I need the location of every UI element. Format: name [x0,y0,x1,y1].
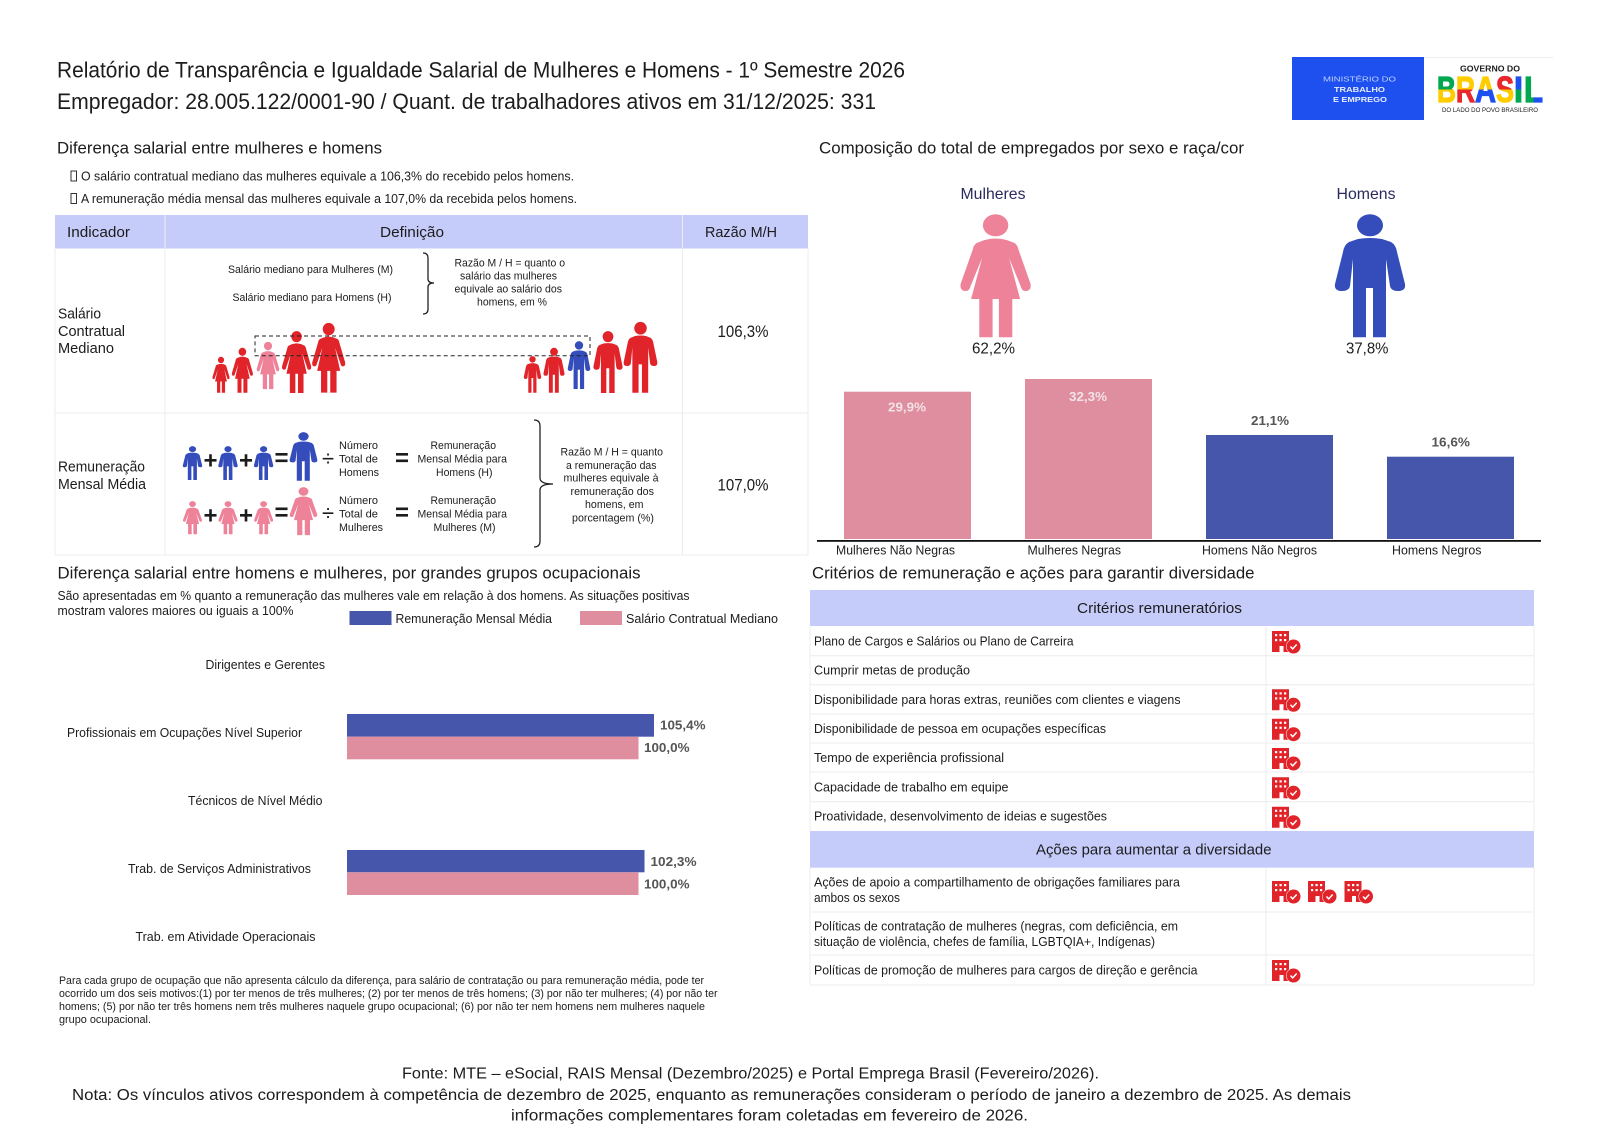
logos: MINISTÉRIO DO [1323,74,1396,84]
bar chart: grupos: 100,0% [644,876,690,892]
bar chart: grupos: Trab. em Atividade Operacionais [136,930,316,944]
bar chart: grupos: Profissionais em Ocupações Nível Superior [67,726,302,740]
bar chart: grupos: 105,4% [660,718,706,732]
logos: A [1475,69,1496,110]
bar chart: raça/cor: Homens Não Negros [1202,544,1317,558]
formula: women [183,487,508,535]
formula: men [183,432,508,481]
row label: remuneração mensal média: Remuneração [58,460,145,476]
action rows: Políticas de promoção de mulheres para cargos de direção e gerência [814,962,1198,978]
table: critérios [810,590,1534,985]
bar chart: raça/cor [817,379,1541,558]
formula: women: Mensal Média para [418,508,508,520]
formula: men: Homens (H) [436,467,492,479]
legend [350,611,778,626]
logos: L [1524,69,1543,110]
table header: Razão M/H [705,224,777,241]
icon: man [1335,214,1405,337]
table header: Indicador [67,224,130,241]
legend: Remuneração Mensal Média [396,611,553,626]
bar chart: grupos: Dirigentes e Gerentes [206,658,325,672]
table header [67,224,777,241]
formula: men: Mensal Média para [418,454,508,466]
definition text: salário mediano: Salário mediano para Mulheres (M) [228,264,393,276]
formula: men: Remuneração [430,440,496,452]
title [57,58,905,114]
formula: women: + [239,502,253,530]
brace [423,253,434,314]
bar chart: raça/cor: 32,3% [1069,389,1107,404]
footnote: motivos: homens; (5) por não ter três homens nem três mulheres naquele grupo ocupacional; (6) por não ter nem homens nem mulheres naquele [59,1001,705,1013]
formula: women: + [203,502,218,530]
icons: actions [1272,881,1374,983]
formula: women: Total de [339,508,378,520]
formula: men: Total de [339,454,378,466]
footnote: motivos [59,975,718,1026]
band: ações: Ações para aumentar a diversidade [1036,842,1272,858]
formula: men: Homens [339,467,379,479]
row label: salário contratual mediano: Mediano [58,341,114,357]
logos: S [1496,69,1514,110]
ratio explanation 1: Razão M / H = quanto o [454,258,565,270]
bar chart: raça/cor: Mulheres Não Negras [836,544,955,558]
row label: remuneração mensal média [58,460,147,493]
legend: Salário Contratual Mediano [626,611,778,626]
title: Relatório de Transparência e Igualdade Salarial de Mulheres e Homens - 1º Semestre 2026 [57,58,905,82]
footer: fonte e nota: informações complementares foram coletadas em fevereiro de 2026. [511,1108,1028,1124]
panel: diferença salarial [55,140,808,555]
bar chart: raça/cor: Mulheres Negras [1028,544,1121,558]
action rows [814,874,1198,978]
formula: women: Mulheres [339,522,383,534]
row label: remuneração mensal média: Mensal Média [58,477,147,493]
bullet 1: O salário contratual mediano das mulheres equivale a 106,3% do recebido pelos homens. [81,170,574,184]
criteria rows: Proatividade, desenvolvimento de ideias e sugestões [814,808,1107,824]
formula: men: + [239,448,253,474]
footer: fonte e nota [72,1066,1351,1124]
bar chart: grupos: Técnicos de Nível Médio [188,794,323,808]
logos [1292,57,1553,120]
logos: TRABALHO [1334,85,1385,94]
formula: men: Número [339,440,378,452]
ratio explanation 2 [560,446,663,524]
title: Empregador: 28.005.122/0001-90 / Quant. de trabalhadores ativos em 31/12/2025: 331 [57,89,876,114]
criteria rows: Plano de Cargos e Salários ou Plano de Carreira [814,634,1074,648]
definition text: salário mediano: Salário mediano para Homens (H) [232,292,392,304]
footnote: motivos: ocorrido um dos seis motivos:(1) por ter menos de três mulheres; (2) por ter menos de três homens; (3) por não ter mulheres; (4) por não ter [59,988,718,1000]
description [58,589,690,618]
footnote: motivos: grupo ocupacional. [59,1014,151,1026]
heading: diferença salarial: Diferença salarial entre mulheres e homens [57,140,382,158]
logos: E EMPREGO [1333,95,1387,104]
action rows: ambos os sexos [814,890,900,905]
footer: fonte e nota: Nota: Os vínculos ativos correspondem à competência de dezembro de 2025, enquanto as remunerações consideram o período de janeiro a dezembro de 2025. As demais [72,1087,1351,1104]
bar chart: grupos [67,658,706,944]
table: indicadores [55,215,808,555]
panel: grupos ocupacionais [58,564,778,1026]
label: mulheres: Mulheres [960,186,1026,203]
panel: critérios e ações [810,564,1534,985]
ratio explanation 2: remuneração dos [570,486,654,498]
bar chart: grupos: Trab. de Serviços Administrativos [128,862,311,876]
formula: women: = [395,500,409,526]
bar chart: raça/cor: 16,6% [1432,434,1470,450]
criteria rows: Cumprir metas de produção [814,662,970,678]
row label: salário contratual mediano: Salário [58,306,101,322]
dashed median box [255,336,590,356]
formula: men: = [395,445,409,472]
ratio explanation 2: a remuneração das [566,460,657,472]
bar chart: raça/cor: 21,1% [1251,413,1289,428]
bullet 2: A remuneração média mensal das mulheres equivale a 107,0% da recebida pelos homens. [81,192,577,206]
ratio explanation 2: porcentagem (%) [572,512,654,524]
icon: woman [960,214,1031,337]
formula: women: Mulheres (M) [434,522,496,534]
heading: composição: Composição do total de empregados por sexo e raça/cor [819,140,1245,158]
big brace [534,420,553,547]
row label: salário contratual mediano [58,306,125,357]
ratio explanation 1: equivale ao salário dos [454,284,562,296]
ratio explanation 1: homens, em % [477,296,547,308]
footnote: motivos: Para cada grupo de ocupação que não apresenta cálculo da diferença, para salário de contratação ou para remuneração média, pode ter [59,975,704,987]
formula: women: Número [339,495,378,507]
criteria rows: Disponibilidade de pessoa em ocupações específicas [814,721,1106,736]
logos: B [1437,69,1456,110]
heading: critérios e ações: Critérios de remuneração e ações para garantir diversidade [812,564,1254,582]
bar chart: raça/cor: 29,9% [888,400,926,414]
definition text: salário mediano [228,264,393,304]
formula: men: + [203,448,218,474]
icons: men line [524,322,657,393]
label: homens: Homens [1336,186,1396,203]
ratio explanation 1 [454,258,565,308]
bar chart: raça/cor: Homens Negros [1392,544,1482,558]
table header: Definição [380,224,444,241]
logos: I [1514,69,1523,110]
ratio explanation 2: homens, em [585,499,644,511]
bar chart: grupos: 102,3% [650,854,697,869]
formula: men: ÷ [322,446,334,471]
value: 106,3%: 106,3% [718,323,769,341]
logos: GOVERNO DO [1460,64,1520,74]
criteria rows: Capacidade de trabalho em equipe [814,780,1008,794]
band: critérios remuneratórios: Critérios remuneratórios [1077,600,1242,617]
median illustration [212,322,657,393]
footer: fonte e nota: Fonte: MTE – eSocial, RAIS Mensal (Dezembro/2025) e Portal Emprega Brasil (Fevereiro/2026). [402,1066,1099,1082]
icons: women line [212,323,345,393]
action rows: Políticas de contratação de mulheres (negras, com deficiência, em [814,918,1178,934]
formula: women: Remuneração [430,495,496,507]
icons: criteria [1272,631,1301,830]
value: 37,8%: 37,8% [1346,340,1389,358]
criteria rows: Tempo de experiência profissional [814,750,1004,765]
logos: DO LADO DO POVO BRASILEIRO [1442,108,1538,114]
bar chart: grupos: 100,0% [644,740,690,755]
ratio explanation 2: mulheres equivale à [564,472,659,484]
formula: men: = [274,445,289,472]
action rows: Ações de apoio a compartilhamento de obrigações familiares para [814,874,1181,890]
criteria rows [814,634,1180,824]
ratio explanation 2: Razão M / H = quanto [560,446,663,458]
description: mostram valores maiores ou iguais a 100% [58,604,294,618]
panel: composição [817,140,1541,558]
formula: women: ÷ [322,500,334,526]
criteria rows: Disponibilidade para horas extras, reuniões com clientes e viagens [814,692,1180,707]
formula: women: = [274,500,289,526]
description: São apresentadas em % quanto a remuneração das mulheres vale em relação à dos homens. As situações positivas [58,589,690,603]
logos: R [1456,69,1475,110]
row label: salário contratual mediano: Contratual [58,324,125,340]
action rows: situação de violência, chefes de família, LGBTQIA+, Indígenas) [814,934,1155,949]
value: 62,2%: 62,2% [972,340,1015,358]
value: 107,0%: 107,0% [718,476,769,494]
heading: grupos ocupacionais: Diferença salarial entre homens e mulheres, por grandes grupos ocupacionais [58,564,640,582]
ratio explanation 1: salário das mulheres [460,270,557,282]
